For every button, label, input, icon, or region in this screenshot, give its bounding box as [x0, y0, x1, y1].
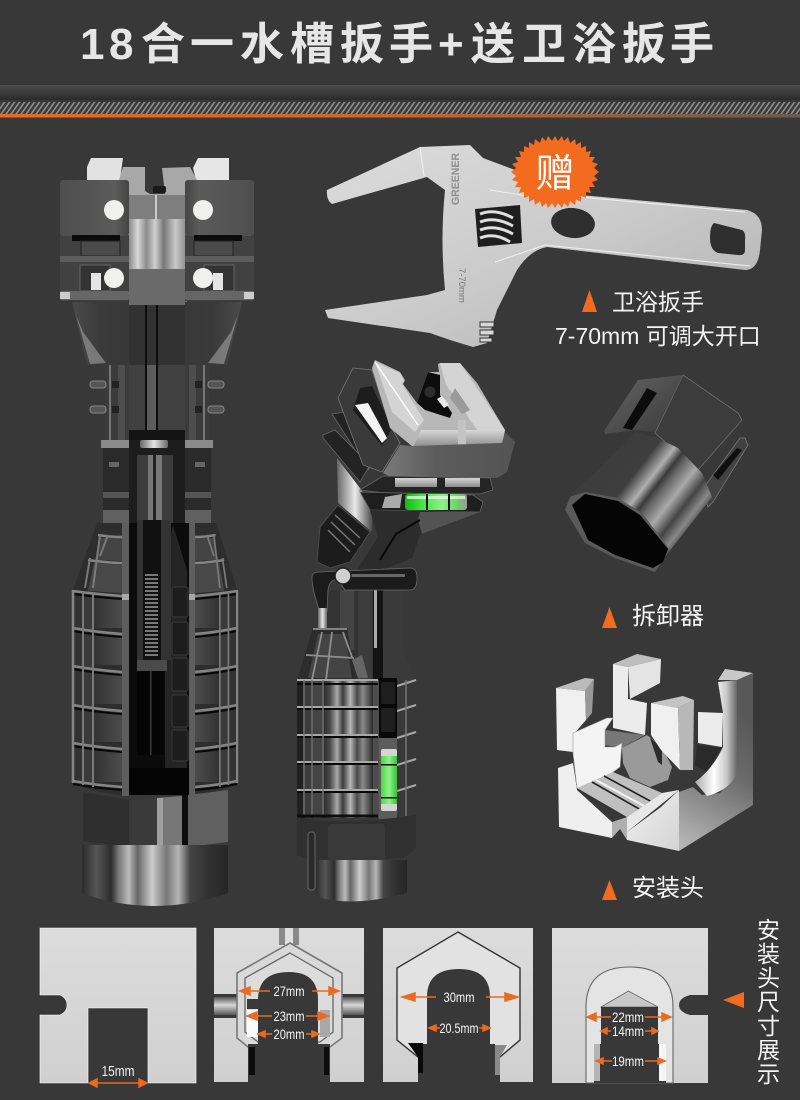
socket remover	[565, 375, 748, 572]
socket rim	[565, 492, 670, 572]
dimension panel: 15mm	[40, 928, 196, 1087]
main tool: 18-in-1 sink wrench cutaway	[60, 158, 254, 906]
pointer arrow to dimension panels	[723, 992, 744, 1008]
plate	[40, 928, 196, 1083]
outer arch	[586, 967, 673, 1083]
gift badge	[511, 136, 599, 208]
arch interior	[605, 730, 672, 787]
ribbed grip	[73, 523, 237, 796]
bottom cylinder	[316, 860, 407, 901]
head side frame	[338, 368, 400, 472]
socket back faces	[604, 375, 748, 507]
screw dots	[104, 200, 213, 288]
head front face	[383, 432, 515, 478]
horizontal level vial	[405, 494, 467, 510]
brand mark: GREENER	[450, 153, 462, 205]
socket barrel	[565, 432, 712, 553]
arch opening	[258, 972, 318, 1045]
side bars and top channel	[214, 928, 364, 1015]
labels	[440, 989, 478, 1036]
thin side plates	[323, 412, 378, 482]
labels: 20mm	[274, 1026, 304, 1042]
wrench gear window with spring	[475, 205, 522, 247]
arrows	[240, 987, 339, 1037]
label: bathroom wrench	[555, 289, 761, 349]
stepped floor	[577, 772, 662, 819]
label: mounting head: 安装头	[632, 875, 704, 902]
vertical caption: 安装头尺寸展示	[757, 917, 780, 1087]
15mm arrow	[89, 1079, 147, 1087]
gift adjustable wrench	[325, 136, 762, 347]
silver jaws on top	[87, 158, 229, 305]
inner opening	[594, 1007, 666, 1083]
gift badge: 赠	[535, 153, 575, 196]
silver jaws top of head	[372, 360, 505, 447]
neck body	[327, 585, 415, 690]
right face and U channel	[679, 669, 753, 851]
labels: 27mm	[274, 983, 304, 999]
dimension panel: 30/20.5mm	[383, 928, 533, 1082]
lower collar	[83, 790, 228, 852]
size engraving: 7-70mm	[456, 268, 467, 303]
labels: 19mm	[612, 1053, 644, 1069]
collar slot	[308, 832, 315, 890]
back middle post	[613, 654, 661, 735]
15mm label: 15mm	[102, 1063, 134, 1080]
title: 18合一水槽扳手+送卫浴扳手	[80, 20, 714, 69]
dimension panel: 27/23/20mm	[214, 928, 364, 1082]
lower slot opening	[418, 1056, 500, 1082]
vertical level vial	[381, 749, 397, 811]
hinge bar and hook	[312, 568, 417, 628]
worm gear teeth	[480, 322, 494, 342]
labels: 20.5mm	[440, 1020, 478, 1036]
collar	[297, 815, 416, 860]
labels: 22mm	[612, 1009, 644, 1025]
grip	[297, 628, 416, 818]
front left post	[556, 678, 594, 752]
label: bathroom wrench: 7-70mm 可调大开口	[555, 323, 761, 349]
handle holes	[550, 206, 745, 255]
wrench highlights	[420, 147, 750, 266]
left and right housing	[60, 180, 254, 525]
lower plates	[360, 476, 493, 512]
socket opening	[572, 494, 668, 568]
labels: 30mm	[444, 989, 474, 1005]
label: bathroom wrench: 卫浴扳手	[612, 289, 704, 315]
hinge ribs	[317, 505, 370, 568]
central body	[129, 305, 187, 525]
silver cylinder	[129, 219, 187, 269]
angled tool with level vials	[297, 360, 515, 901]
label: remover: 拆卸器	[632, 603, 704, 630]
header divider band	[0, 85, 800, 118]
silver mounting head	[556, 654, 753, 851]
center slot	[379, 678, 397, 822]
lip shading	[408, 1043, 507, 1075]
front middle post	[651, 696, 694, 770]
left inner pillar	[573, 718, 622, 788]
bracket	[357, 510, 480, 570]
labels: 23mm	[274, 1008, 304, 1024]
labels: 14mm	[612, 1023, 644, 1039]
inner peak	[601, 991, 658, 1007]
front base faces	[558, 763, 679, 851]
plate	[383, 928, 533, 1082]
bottom socket cylinder	[82, 845, 228, 906]
pivot screw	[335, 568, 351, 584]
plate	[552, 928, 708, 1083]
house outline	[397, 932, 520, 1057]
arch and opening	[423, 969, 495, 1058]
arrows	[402, 993, 518, 1031]
lower slot	[247, 999, 330, 1082]
plate	[214, 928, 364, 1082]
dimension panel: 22/14/19mm	[552, 928, 708, 1083]
cutaway interior with spring and rod	[129, 520, 189, 795]
house frame	[237, 943, 342, 1047]
labels	[274, 983, 304, 1042]
arrows	[587, 1013, 671, 1064]
wrench body	[325, 145, 762, 347]
flared neck	[337, 458, 373, 532]
bright sides	[594, 1044, 666, 1081]
labels	[612, 1009, 644, 1069]
